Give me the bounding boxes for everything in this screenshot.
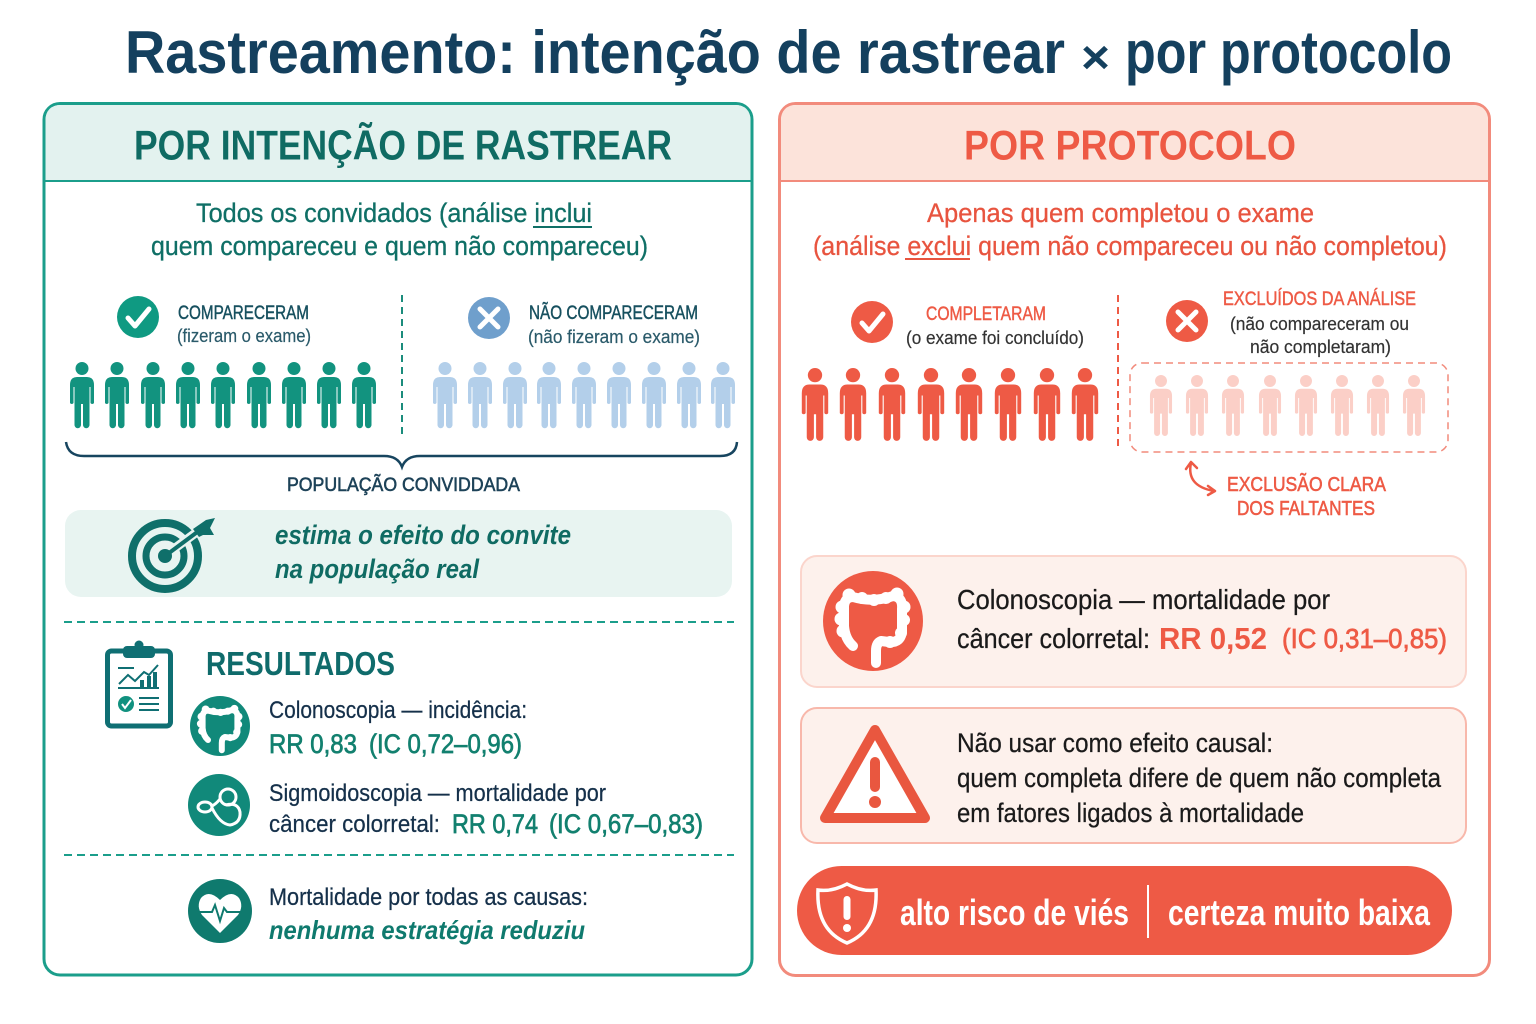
brace: invited population	[66, 442, 737, 467]
result: all-cause mortality	[269, 884, 588, 945]
card: causal warning: quem completa difere de quem não completa	[957, 763, 1442, 793]
label: attended: COMPARECERAM	[178, 303, 309, 324]
label: did not attend	[528, 302, 700, 347]
callout: effect of invitation: na população real	[275, 554, 479, 584]
banner: high risk of bias: certeza muito baixa	[1168, 892, 1431, 933]
icon: target	[132, 518, 215, 589]
callout: effect of invitation: estima o efeito do convite	[275, 520, 571, 550]
panel: por protocolo	[780, 104, 1490, 976]
subtitle: only completers: Apenas quem completou o exame	[927, 198, 1314, 228]
arrow: exclusion	[1186, 462, 1215, 495]
icon: warning triangle	[825, 730, 925, 818]
result: colonoscopy incidence: Colonoscopia — incidência:	[269, 697, 527, 724]
label: attended	[177, 303, 311, 346]
result: sigmoidoscopy mortality: (IC 0,67–0,83)	[549, 809, 703, 839]
result: sigmoidoscopy mortality: RR 0,74	[452, 809, 538, 839]
label: excluded: (não compareceram ou	[1230, 314, 1409, 334]
subtitle: all invited	[151, 198, 648, 261]
panel: por intenção de rastrear	[44, 104, 752, 975]
result: sigmoidoscopy mortality	[269, 780, 703, 839]
subtitle: only completers	[813, 198, 1447, 261]
heading: results: RESULTADOS	[206, 645, 395, 682]
card: causal warning	[801, 708, 1466, 843]
icon: sigmoidoscope	[188, 774, 250, 836]
label: completed: COMPLETARAM	[926, 304, 1046, 325]
label: did not attend: (não fizeram o exame)	[528, 327, 700, 347]
label: completed	[906, 304, 1084, 348]
people: completed	[802, 368, 1098, 441]
banner: high risk of bias	[797, 866, 1452, 955]
card: causal warning: Não usar como efeito causal:	[957, 728, 1273, 758]
card: colonoscopy mortality: (IC 0,31–0,85)	[1282, 623, 1447, 654]
people: attended	[70, 362, 376, 428]
card: colonoscopy mortality: Colonoscopia — mortalidade por	[957, 584, 1330, 615]
banner: high risk of bias: alto risco de viés	[900, 892, 1129, 933]
icon: heart	[188, 879, 252, 943]
label: attended: (fizeram o exame)	[177, 326, 311, 346]
title: ×	[1081, 31, 1110, 83]
label: invited population: POPULAÇÃO CONVIDDADA	[287, 474, 520, 496]
label: excluded: EXCLUÍDOS DA ANÁLISE	[1223, 289, 1416, 310]
title: Rastreamento: intenção de rastrear	[125, 19, 1065, 86]
result: sigmoidoscopy mortality: Sigmoidoscopia — mortalidade por	[269, 780, 606, 807]
label: excluded	[1223, 289, 1416, 357]
callout: effect of invitation	[65, 510, 732, 597]
excluded group box	[1130, 363, 1448, 452]
result: colonoscopy incidence: RR 0,83	[269, 729, 357, 759]
icon: check, attended	[117, 296, 159, 338]
people: excluded	[1150, 375, 1425, 436]
panel header: intention to screen	[45, 105, 751, 181]
icon: shield	[818, 884, 876, 943]
card: causal warning: em fatores ligados à mortalidade	[957, 798, 1304, 828]
label: completed: (o exame foi concluído)	[906, 328, 1084, 348]
label: clear exclusion	[1227, 472, 1387, 520]
label: clear exclusion: EXCLUSÃO CLARA	[1227, 472, 1387, 496]
result: all-cause mortality: nenhuma estratégia reduziu	[269, 915, 585, 945]
subtitle: all invited: Todos os convidados (análise inclui	[196, 198, 592, 228]
panel header: per protocol: POR PROTOCOLO	[964, 122, 1296, 168]
card: colonoscopy mortality: RR 0,52	[1159, 621, 1267, 656]
label: did not attend: NÃO COMPARECERAM	[529, 302, 698, 324]
label: clear exclusion: DOS FALTANTES	[1237, 498, 1375, 520]
card: colonoscopy mortality	[801, 556, 1466, 687]
label: excluded: não completaram)	[1250, 337, 1391, 357]
icon: cross, excluded	[1166, 300, 1208, 342]
subtitle: all invited: quem compareceu e quem não compareceu)	[151, 231, 648, 261]
panel header: per protocol	[780, 105, 1489, 181]
result: colonoscopy incidence: (IC 0,72–0,96)	[369, 729, 522, 759]
title: por protocolo	[1125, 19, 1452, 86]
icon: check, completed	[851, 301, 893, 343]
icon: colon	[823, 571, 923, 671]
subtitle: only completers: (análise exclui quem não compareceu ou não completou)	[813, 231, 1447, 261]
icon: colon	[190, 696, 250, 756]
result: all-cause mortality: Mortalidade por todas as causas:	[269, 884, 588, 911]
card: colonoscopy mortality: câncer colorretal:	[957, 623, 1150, 654]
people: did not attend	[433, 362, 735, 428]
result: sigmoidoscopy mortality: câncer colorretal:	[269, 811, 440, 838]
result: colonoscopy incidence	[269, 697, 527, 759]
icon: cross, did not attend	[468, 297, 510, 339]
icon: clipboard	[108, 640, 170, 726]
panel header: intention to screen: POR INTENÇÃO DE RASTREAR	[134, 122, 672, 168]
